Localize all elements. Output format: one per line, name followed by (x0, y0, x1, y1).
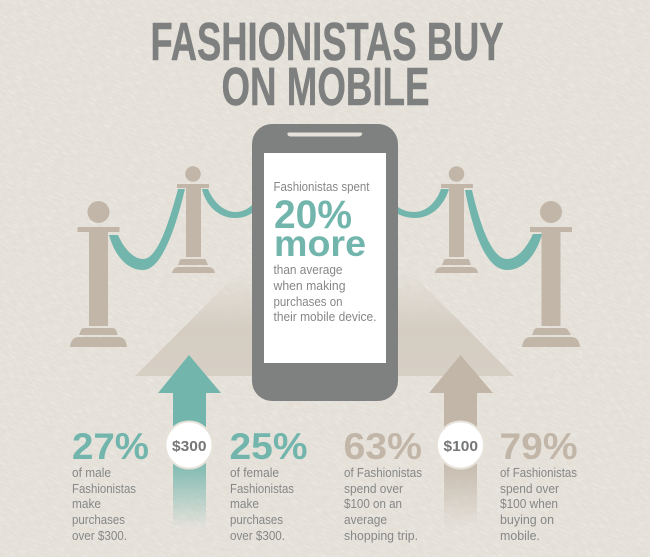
stat: 79% on mobile: of Fashionistas (500, 466, 577, 480)
stat: 27% of male (72, 426, 149, 543)
stat: 27% of male: 27% (72, 426, 149, 467)
stat: 79% on mobile: $100 when (500, 497, 558, 511)
stat: 25% of female: over $300. (230, 529, 285, 543)
badge: $100 (437, 422, 484, 468)
phone screen text: than average (274, 263, 342, 277)
stat: 27% of male: make (72, 497, 101, 511)
stat: 63% average trip: $100 on an (344, 497, 402, 511)
badge: $300: $300 (172, 438, 206, 455)
stat: 79% on mobile: buying on (500, 513, 554, 527)
title (150, 12, 504, 117)
arrow: tan (429, 355, 493, 528)
stanchion: inner right (435, 166, 478, 273)
stat: 25% of female: purchases (230, 513, 283, 527)
phone screen text: Fashionistas spent (274, 180, 370, 194)
stanchion: inner left (172, 166, 215, 273)
stat: 25% of female: Fashionistas (230, 482, 294, 496)
phone screen text: when making (273, 279, 346, 293)
phone screen text: 20% (274, 193, 352, 237)
phone screen text: more (274, 223, 366, 264)
velvet ropes (109, 189, 542, 270)
stat: 27% of male: Fashionistas (72, 482, 136, 496)
phone screen text: their mobile device. (274, 310, 376, 324)
phone screen text (273, 180, 376, 324)
stanchion: far right (522, 201, 580, 347)
stat: 63% average trip: shopping trip. (344, 529, 418, 543)
phone screen (264, 153, 386, 363)
stat: 27% of male: over $300. (72, 529, 127, 543)
stat: 25% of female (230, 426, 308, 543)
phone (252, 124, 398, 401)
stat: 79% on mobile (500, 426, 578, 543)
stat: 25% of female: of female (230, 466, 279, 480)
stat: 63% average trip: 63% (344, 426, 422, 467)
stat: 79% on mobile: mobile. (500, 529, 540, 543)
background triangle (135, 186, 514, 376)
badge: $100: $100 (444, 438, 478, 455)
stat: 27% of male: purchases (72, 513, 125, 527)
stat: 63% average trip: of Fashionistas (344, 466, 422, 480)
phone screen text: purchases on (274, 295, 342, 309)
title: ON MOBILE (222, 57, 430, 117)
phone speaker (287, 132, 362, 136)
arrow: teal (158, 355, 221, 528)
stat: 79% on mobile: spend over (500, 482, 559, 496)
stanchion: far left (70, 201, 127, 347)
stat: 79% on mobile: 79% (500, 426, 578, 467)
badge: $300 (166, 422, 212, 468)
stat: 63% average trip: average (344, 513, 387, 527)
stat: 63% average trip: spend over (344, 482, 403, 496)
stat: 63% average trip (344, 426, 422, 543)
stat: 27% of male: of male (72, 466, 111, 480)
stat: 25% of female: 25% (230, 426, 308, 467)
stat: 25% of female: make (230, 497, 259, 511)
